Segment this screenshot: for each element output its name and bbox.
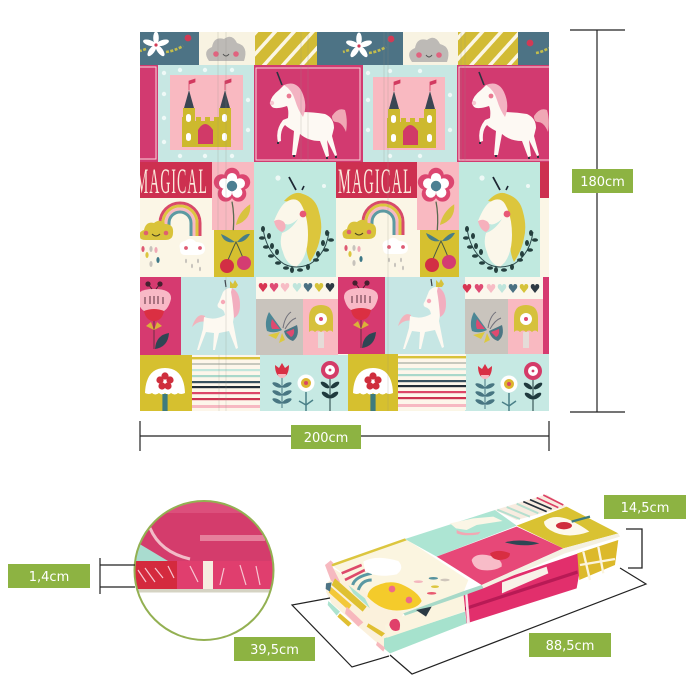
artwork: cherry on fold	[389, 619, 400, 631]
long side, upper cream layer	[385, 591, 466, 638]
play mat, unfolded	[136, 32, 549, 418]
artwork: pink tile flower	[472, 555, 502, 570]
magnified edge detail	[134, 500, 274, 641]
dimension: width 200cm	[140, 421, 549, 451]
label: 180cm: 180cm	[580, 175, 625, 190]
third row: magical banners, rainbows, flowers, cherries, unicorn heads: MAGICAL	[136, 161, 208, 201]
label: 14,5cm: 14,5cm	[621, 501, 669, 516]
dimension: height 180cm	[570, 30, 633, 412]
artwork: leaf	[505, 541, 539, 545]
label: 88,5cm: 88,5cm	[546, 639, 594, 654]
second row: castles and horses	[140, 65, 549, 162]
artwork: white cloud	[363, 558, 401, 576]
dimension: thickness 1,4cm	[8, 558, 135, 594]
artwork: rain drops	[414, 577, 450, 595]
fold creases	[218, 32, 465, 411]
artwork: umbrella flower	[556, 522, 572, 529]
artwork: rainbow	[342, 565, 365, 580]
short end, stacked layers	[325, 565, 385, 652]
label: 180cm	[572, 169, 633, 193]
artwork: cheeks	[389, 586, 412, 603]
short end, yellow and white layers	[577, 540, 618, 580]
top face panels	[325, 494, 620, 616]
dimension: folded length 88,5cm	[390, 568, 646, 674]
left end base	[325, 565, 403, 653]
top row tiles	[140, 32, 549, 65]
artwork: umbrella stem	[572, 517, 590, 522]
third row: magical banners, rainbows, flowers, cherries, unicorn heads: MAGICAL	[338, 161, 413, 201]
label: 88,5cm	[529, 633, 611, 657]
label: 200cm	[291, 425, 361, 449]
artwork: red flower head	[490, 551, 510, 560]
label: 200cm: 200cm	[304, 431, 348, 446]
artwork: unicorn leg	[450, 517, 503, 530]
artwork: umbrella	[544, 517, 589, 535]
artwork: pink tail	[457, 530, 481, 535]
bottom row: umbrellas, stripes, flowers	[140, 354, 549, 411]
bracket: folded height 14,5cm	[604, 495, 686, 568]
label: 1,4cm: 1,4cm	[29, 570, 69, 585]
artwork: rainbow arc	[353, 573, 372, 590]
folded mat	[325, 494, 620, 653]
artwork: yellow cloud	[367, 582, 422, 611]
long side, pink layers	[463, 553, 580, 623]
fourth row: flowers, unicorns, hearts, butterflies	[137, 277, 549, 355]
label: 39,5cm	[234, 637, 315, 661]
dimension: folded width 39,5cm	[234, 598, 389, 667]
long side, lower mint	[384, 612, 467, 653]
third row: magical banners, rainbows, flowers, cherries, unicorn heads	[136, 161, 549, 277]
label: 39,5cm: 39,5cm	[250, 643, 299, 658]
artwork: feather on fold	[416, 607, 432, 617]
